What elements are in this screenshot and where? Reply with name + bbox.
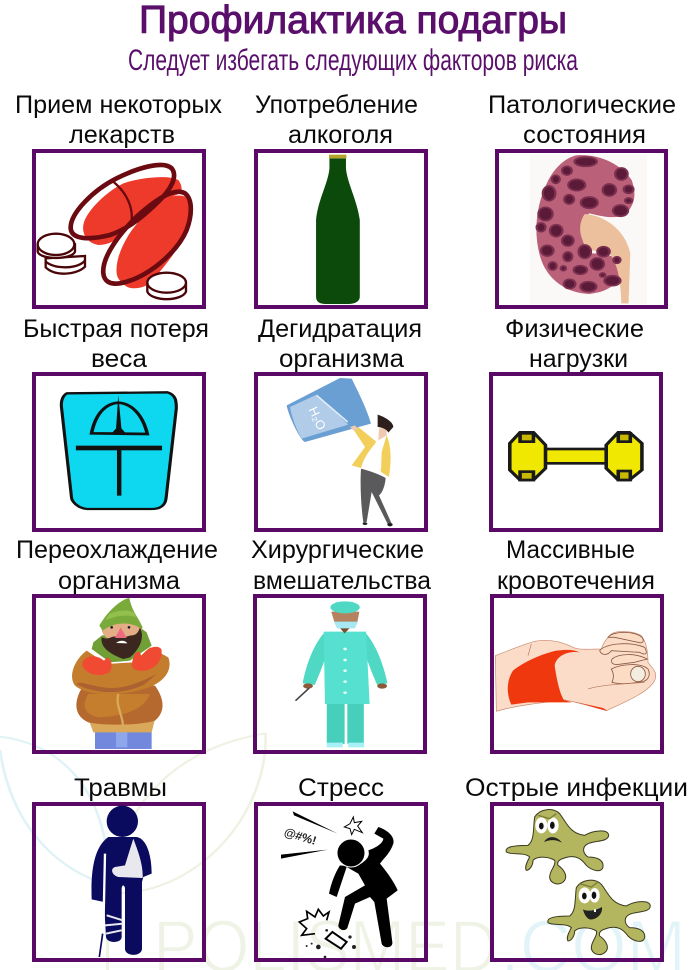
heading: bleeding: кровотечения bbox=[497, 567, 655, 595]
panel: pathological conditions bbox=[488, 91, 676, 307]
heading: conditions bbox=[488, 91, 676, 149]
heading: dehydration: Дегидратация bbox=[258, 315, 422, 343]
frame bbox=[492, 804, 662, 960]
panel: stress bbox=[256, 774, 426, 960]
heading: medications bbox=[15, 91, 222, 149]
heading: stress: Стресс bbox=[298, 774, 384, 802]
frame bbox=[255, 596, 425, 752]
heading: bleeding bbox=[497, 536, 655, 595]
panel: physical exertion bbox=[491, 315, 661, 530]
heading: hypothermia: Переохлаждение bbox=[16, 536, 218, 564]
icon: freezing man bbox=[72, 598, 170, 749]
frame bbox=[491, 374, 661, 530]
heading: medications: лекарств bbox=[69, 121, 175, 149]
heading: conditions: Патологические bbox=[488, 91, 676, 119]
heading: dehydration bbox=[258, 315, 422, 373]
icon: person drinking water: H₂O bbox=[306, 405, 328, 432]
heading: surgery bbox=[251, 536, 431, 595]
heading: exertion bbox=[505, 315, 644, 373]
icon: person with crutch bbox=[91, 806, 152, 957]
icon: germs bbox=[506, 810, 650, 955]
frame bbox=[34, 596, 204, 752]
icon: scales bbox=[61, 392, 176, 509]
heading: weight loss: Быстрая потеря bbox=[23, 315, 209, 343]
frame bbox=[256, 151, 426, 307]
heading: exertion: нагрузки bbox=[529, 345, 628, 373]
heading: exertion: Физические bbox=[505, 315, 644, 343]
title: Профилактика подагры bbox=[139, 0, 567, 42]
heading: surgery: вмешательства bbox=[253, 567, 431, 595]
icon: kidney bbox=[530, 155, 647, 304]
panel: medications bbox=[15, 91, 222, 307]
heading: weight loss bbox=[23, 315, 209, 373]
heading: hypothermia bbox=[16, 536, 218, 595]
icon: angry figure: @#%! bbox=[282, 825, 318, 848]
frame bbox=[256, 374, 426, 530]
icon: person drinking water bbox=[287, 378, 393, 526]
icon: bottle bbox=[316, 155, 360, 304]
frame bbox=[34, 374, 204, 530]
frame bbox=[256, 804, 426, 960]
heading: alcohol: алкоголя bbox=[288, 121, 393, 149]
heading: conditions: состояния bbox=[523, 121, 646, 149]
panel: hypothermia bbox=[16, 536, 218, 752]
icon: dumbbell bbox=[510, 432, 642, 480]
icon: pills bbox=[38, 165, 191, 299]
heading: injuries: Травмы bbox=[74, 774, 167, 802]
frame bbox=[492, 596, 662, 752]
heading: alcohol: Употребление bbox=[255, 91, 418, 119]
icon: surgeon bbox=[296, 601, 387, 747]
panel: acute infections bbox=[465, 774, 688, 960]
heading: dehydration: организма bbox=[279, 345, 404, 373]
panel: alcohol bbox=[255, 91, 426, 307]
heading: medications: Прием некоторых bbox=[15, 91, 222, 119]
icon: bleeding wrist bbox=[495, 631, 656, 711]
watermark bbox=[0, 733, 686, 970]
panel: injuries bbox=[34, 774, 204, 960]
heading: surgery: Хирургические bbox=[251, 536, 424, 564]
panel: rapid weight loss bbox=[23, 315, 209, 530]
panel: massive bleeding bbox=[492, 536, 662, 752]
frame bbox=[497, 151, 666, 307]
heading: bleeding: Массивные bbox=[506, 536, 635, 564]
frame bbox=[34, 804, 204, 960]
heading: infections: Острые инфекции bbox=[465, 774, 688, 802]
panel: dehydration bbox=[256, 315, 426, 530]
frame bbox=[34, 151, 204, 307]
heading: weight loss: веса bbox=[91, 345, 147, 373]
icon: angry figure bbox=[281, 811, 398, 958]
heading: alcohol bbox=[255, 91, 418, 149]
heading: hypothermia: организма bbox=[58, 567, 180, 595]
panel: surgery bbox=[251, 536, 431, 752]
